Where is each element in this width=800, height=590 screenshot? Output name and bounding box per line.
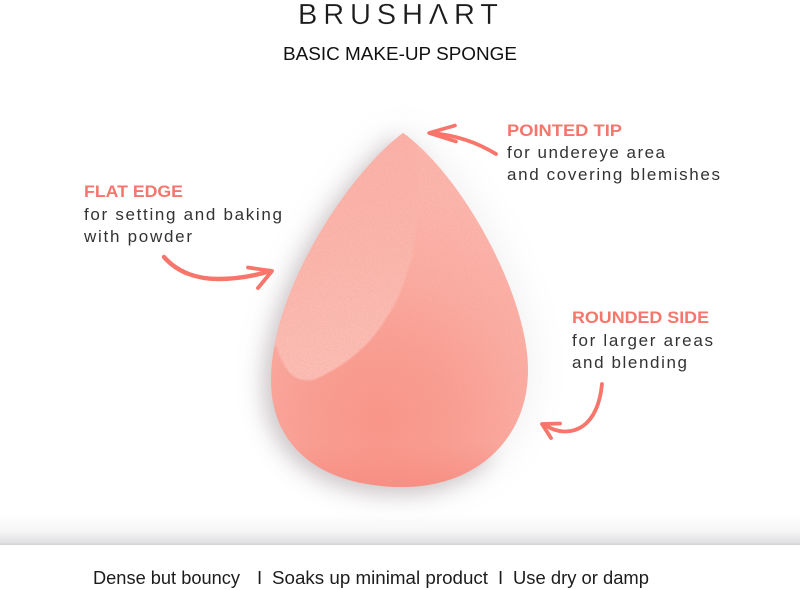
sponge cast shadow (263, 138, 490, 495)
subtitle: BASIC MAKE-UP SPONGE (283, 44, 517, 64)
flat edge facet (274, 133, 415, 381)
arrow: to pointed tip (429, 126, 496, 154)
footer features text: Use dry or damp (513, 567, 649, 588)
label description: for setting and baking (84, 205, 282, 224)
sponge soft halo (271, 133, 528, 487)
label description: for undereye area (507, 143, 666, 162)
label heading: FLAT EDGE (84, 182, 183, 201)
label description: for larger areas (572, 331, 713, 350)
callout: pointed tip (429, 121, 720, 184)
footer features text: Soaks up minimal product (272, 567, 488, 588)
footer features text: I (257, 567, 262, 588)
label description: and covering blemishes (507, 165, 720, 184)
label heading: POINTED TIP (507, 121, 622, 140)
label description: and blending (572, 353, 687, 372)
label heading: ROUNDED SIDE (572, 308, 709, 327)
footer features text (93, 567, 649, 588)
footer features text: Dense but bouncy (93, 567, 241, 588)
floor shadow band (0, 514, 800, 545)
footer panel (0, 545, 800, 590)
callout: rounded side (542, 308, 713, 438)
label description: with powder (83, 227, 192, 246)
arrow: to flat edge (164, 257, 272, 288)
callout: flat edge (83, 182, 282, 288)
footer features text: I (498, 567, 503, 588)
sponge illustration (260, 125, 540, 495)
arrow: to rounded side (542, 384, 602, 438)
sponge texture (279, 192, 509, 379)
sponge body (271, 133, 528, 487)
